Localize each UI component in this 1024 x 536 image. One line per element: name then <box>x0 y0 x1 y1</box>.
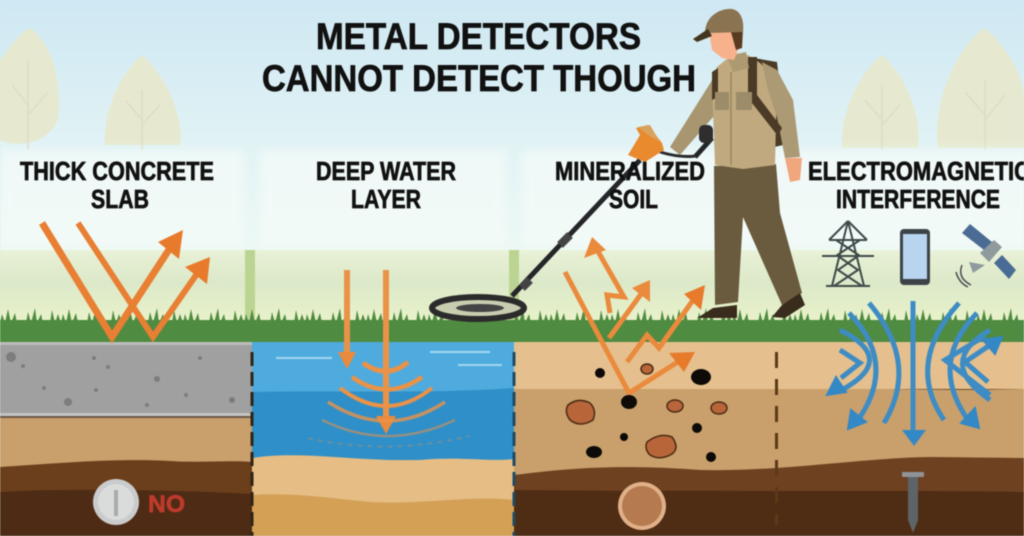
soil panel: water column <box>252 342 514 536</box>
soil panel: concrete slab column <box>0 342 252 536</box>
background trees <box>0 28 1024 150</box>
near arm <box>762 62 800 158</box>
arrows and waves: attenuated in water <box>308 270 470 447</box>
control box <box>628 125 664 162</box>
meadow background <box>0 250 1024 322</box>
mineral rocks <box>566 364 727 462</box>
label: deep water layer: LAYER <box>351 184 421 214</box>
title <box>262 16 696 99</box>
coin with no label <box>93 479 185 525</box>
icon: smartphone <box>900 229 930 285</box>
label: mineralized soil: MINERALIZED <box>555 156 705 186</box>
head <box>709 32 742 60</box>
label: thick concrete slab <box>20 156 214 214</box>
label: thick concrete slab: SLAB <box>91 184 149 214</box>
title: METAL DETECTORS <box>316 16 641 57</box>
white label panels <box>0 150 1024 246</box>
collar <box>727 52 749 72</box>
icon: power tower <box>822 221 874 286</box>
soil panel: mineralized soil and interference column <box>514 342 1024 536</box>
iron nail <box>902 472 924 533</box>
label: mineralized soil: SOIL <box>609 184 658 214</box>
detector shaft <box>512 138 712 296</box>
cap <box>705 9 743 33</box>
coin with no label: NO <box>148 491 185 518</box>
icon: satellite <box>956 224 1016 287</box>
backpack <box>748 57 784 148</box>
label: electromagnetic interference <box>808 156 1024 214</box>
interference arrows <box>827 301 1002 446</box>
pants <box>714 164 802 305</box>
panel dividers in meadow <box>245 250 519 320</box>
person with backpack <box>670 9 805 318</box>
boots <box>697 293 805 318</box>
concrete slab <box>0 342 252 418</box>
label: deep water layer: DEEP WATER <box>316 156 456 186</box>
metal detector <box>432 125 712 319</box>
hands <box>785 158 802 182</box>
straps <box>748 57 782 136</box>
arrows: reflected by concrete <box>42 223 210 337</box>
copper coin <box>618 482 666 530</box>
sky background <box>0 0 1024 250</box>
label: mineralized soil <box>555 156 705 214</box>
label: deep water layer <box>316 156 456 214</box>
grass strip <box>0 303 1024 342</box>
title: CANNOT DETECT THOUGH <box>262 58 696 99</box>
jacket <box>712 55 777 169</box>
far arm <box>670 74 716 155</box>
label: thick concrete slab: THICK CONCRETE <box>20 156 214 186</box>
dashed panel separators <box>252 352 776 536</box>
arrows: scattered by mineralized soil <box>565 237 705 393</box>
detector coil <box>432 297 524 319</box>
